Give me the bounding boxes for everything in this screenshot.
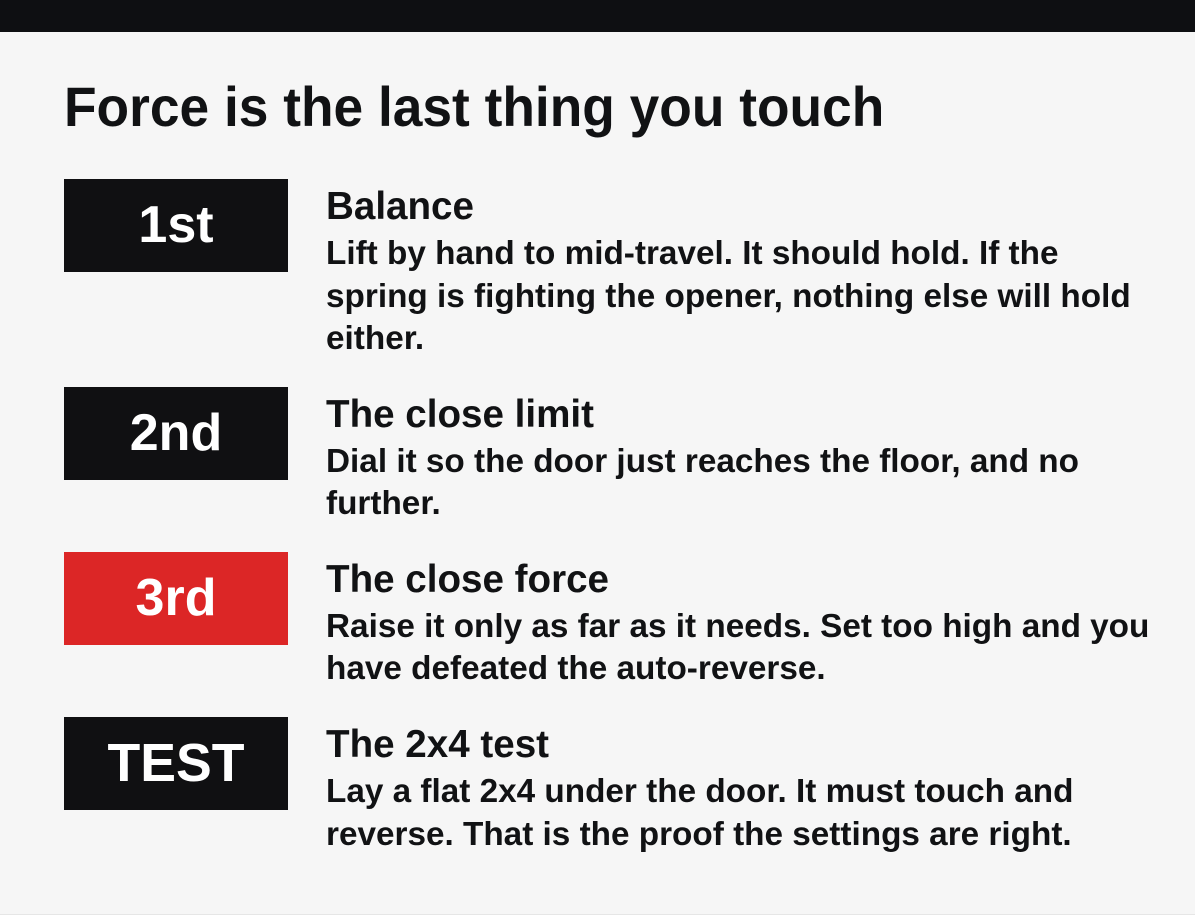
text: balance: either. bbox=[326, 320, 424, 357]
badge: 3rd: 3rd bbox=[136, 569, 216, 627]
text: close force: Raise it only as far as it needs. Set too high and you bbox=[326, 608, 1149, 645]
top bar bbox=[0, 0, 1195, 32]
badge: 2nd: 2nd bbox=[130, 404, 222, 462]
step: 1st balance bbox=[64, 179, 1131, 357]
text: close force: have defeated the auto-reverse. bbox=[326, 650, 826, 687]
title: Force is the last thing you touch bbox=[64, 77, 884, 138]
heading: 2x4 test: The 2x4 test bbox=[326, 723, 549, 766]
badge: 2nd bbox=[64, 387, 288, 480]
badge: 1st bbox=[64, 179, 288, 272]
text: 2x4 test bbox=[326, 773, 1073, 852]
badge: 1st: 1st bbox=[138, 196, 214, 254]
text: balance: spring is fighting the opener, nothing else will hold bbox=[326, 278, 1131, 314]
text: close force bbox=[326, 608, 1149, 687]
step: 2nd close limit bbox=[64, 387, 1079, 522]
text: close limit: further. bbox=[326, 485, 441, 522]
badge: test: TEST bbox=[108, 733, 244, 793]
text: 2x4 test: reverse. That is the proof the settings are right. bbox=[326, 816, 1072, 852]
text: 2x4 test: Lay a flat 2x4 under the door. It must touch and bbox=[326, 773, 1073, 810]
badge: test bbox=[64, 717, 288, 810]
step: 3rd close force bbox=[64, 552, 1149, 687]
heading: close force: The close force bbox=[326, 558, 609, 601]
badge: 3rd bbox=[64, 552, 288, 645]
heading: balance: Balance bbox=[326, 185, 474, 228]
text: balance bbox=[326, 235, 1131, 357]
step: test bbox=[64, 717, 1073, 852]
heading: close limit: The close limit bbox=[326, 393, 594, 436]
text: balance: Lift by hand to mid-travel. It should hold. If the bbox=[326, 235, 1058, 272]
text: close limit: Dial it so the door just reaches the floor, and no bbox=[326, 443, 1079, 480]
text: close limit bbox=[326, 443, 1079, 522]
